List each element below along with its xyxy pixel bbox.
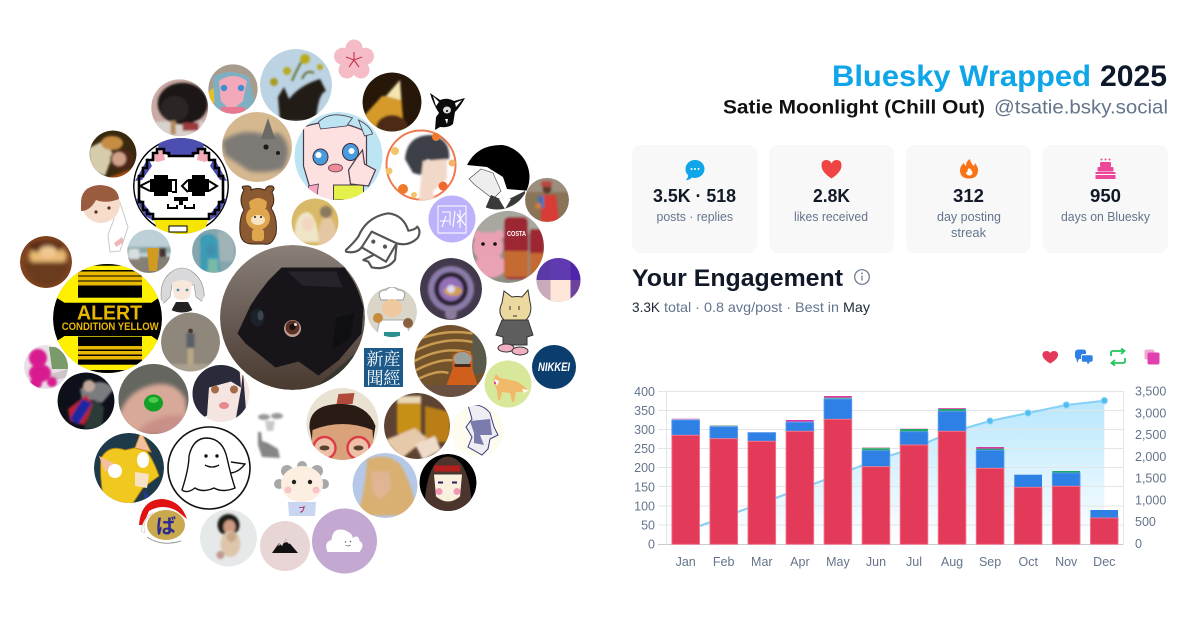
bar: Apr [786,420,814,544]
avatar: Nikkei logo [532,345,576,389]
month labels: Feb [713,555,735,569]
avatar: chihuahua [430,93,465,130]
stat value: 2.8K [813,185,851,206]
avatar: cream cat in gray hoodie [496,290,533,355]
left axis labels: 0 [648,538,655,552]
icon: likes heart [1042,351,1058,364]
avatar: woman with orange cat [89,130,136,180]
avatar: purple beyblade gem [420,258,482,320]
avatar: cartoon chef [367,287,417,337]
avatar: man smoking in dark [58,372,114,430]
heading: your engagement: Your Engagement [632,265,843,292]
bar: Mar [748,432,776,544]
stacked bars [672,396,1118,544]
avatar: beer glasses [384,393,450,460]
avatar: magenta teddy bear by the window [24,345,68,389]
avatar: alert condition yellow: CONDITION YELLOW [62,321,159,333]
month labels: Mar [751,555,773,569]
month labels: Apr [790,555,810,569]
cumulative area [686,401,1104,544]
avatar: green gem on a finger [118,364,190,435]
avatar: lilac cloud [312,508,377,574]
stat value: 312 [953,185,984,206]
month labels: Dec [1093,555,1115,569]
stat label: day posting [937,210,1001,224]
avatar: gray cat [222,112,292,182]
avatar: mountain logo [260,521,310,571]
left axis labels: 250 [634,442,655,456]
icon: quotes squares [1144,350,1160,364]
avatar: sunset silhouette [362,72,422,132]
avatar: black-haired anime girl [191,364,250,424]
avatar: Nikkei logo: NIKKEI [538,362,571,374]
panel: day posting streak [906,145,1031,253]
avatar: large black pug [220,242,368,390]
bar: Aug [938,408,966,544]
engagement summary: 3.3K [632,299,661,315]
left axis labels: 150 [634,480,655,494]
avatar cluster [20,40,580,574]
left axis labels: 400 [634,385,655,399]
month labels: Oct [1018,555,1038,569]
month labels: Jun [866,555,886,569]
avatar: drink on the table [127,230,171,275]
stat value: 3.5K · 518 [653,185,736,206]
stat label: streak [951,226,987,240]
icon: info [855,270,869,284]
avatar: alert condition yellow [53,264,162,373]
avatar: navy pen sketch [452,405,504,457]
right axis labels: 1,500 [1135,472,1166,486]
left axis labels: 350 [634,404,655,418]
month labels: Aug [941,555,963,569]
right axis labels: 1,000 [1135,494,1166,508]
left axis labels: 100 [634,500,655,514]
chart legend icons [1042,348,1160,366]
icon: flame [960,159,978,178]
panel: days on Bluesky [1043,145,1168,253]
bar: Feb [710,425,738,544]
right axis labels: 500 [1135,515,1156,529]
stat label: days on Bluesky [1061,210,1151,224]
right axis labels: 3,500 [1135,384,1166,398]
right axis labels [1135,384,1166,551]
icon: heart [822,160,842,178]
right axis labels: 3,000 [1135,406,1166,420]
engagement summary: total · 0.8 avg/post · Best in [664,299,839,315]
avatar: pink bear and Costa bottles [472,211,544,283]
user name and handle [723,96,1168,118]
month labels: Jul [906,555,922,569]
month labels: Jan [676,555,696,569]
left axis labels: 200 [634,461,655,475]
bar: Sep [976,447,1004,544]
avatar: yellow fox girl [94,432,164,506]
avatar: orange toy on wicker [414,324,487,399]
bar: Jun [862,447,890,544]
right axis labels: 2,000 [1135,450,1166,464]
bar: Nov [1052,471,1080,544]
avatar: smiling ghost in ring [168,427,250,509]
avatar: manga black-haired figure [465,145,531,211]
right axis labels: 2,500 [1135,428,1166,442]
month labels: Sep [979,555,1001,569]
bar: Jul [900,428,928,544]
month labels [676,555,1115,569]
cumulative line [686,397,1108,531]
left axis labels: 50 [641,518,655,532]
avatar: big pink anime character [294,112,382,200]
avatar: black poodle [151,79,209,137]
avatar: hooded girl on yellow [292,198,338,246]
bar: Dec [1090,510,1118,544]
avatar: pink plum flower [334,40,374,78]
avatar: white-haired elf [160,268,204,312]
avatar: orange fox on green [484,360,532,408]
avatar: geisha with red headband [420,454,476,512]
avatar: lilac seal [428,196,476,242]
avatar: blonde woman [352,453,418,518]
icon: replies bubbles [1075,350,1093,365]
bar: Oct [1014,475,1042,544]
avatar: Santa hat ball [139,499,187,543]
avatar: cartoon grandma: ブ [298,505,306,515]
left axis labels [634,385,655,552]
stat value: 950 [1090,185,1121,206]
bar: May [824,396,852,544]
panel: likes received [769,145,894,253]
avatar: woman holding dog [200,510,257,566]
avatar: Sankei newspaper seal: 聞經 [366,364,400,389]
avatar: pink-haired anime girl [208,64,258,115]
avatar: line-art ghost girl [346,213,419,268]
avatar: brown bear with tiger cub [240,186,276,244]
icon: reposts arrows [1111,348,1125,366]
title: Bluesky Wrapped [832,60,1091,93]
icon: chat bubble [685,160,704,180]
month labels: May [826,555,850,569]
user name and handle: @tsatie.bsky.social [994,96,1168,118]
stat label: likes received [794,210,868,224]
avatar: teal-haired girl [192,229,236,273]
avatar: pixel panda with sunglasses [133,136,229,236]
avatar: man with red glasses [306,388,378,460]
avatar: Santa hat ball: ば [156,510,176,539]
avatar: cartoon grandma [274,461,329,516]
stat label [937,210,1001,240]
user name and handle: Satie Moonlight (Chill Out) [723,96,985,118]
avatar: man at a wall [160,312,220,374]
right axis labels: 0 [1135,537,1142,551]
avatar: pink bear and Costa bottles: COSTA [507,231,526,238]
engagement summary: May [843,299,870,315]
avatar: yellow flowers and dark hand [260,49,332,121]
left axis labels: 300 [634,423,655,437]
avatar: purple pixel blocks [536,258,580,302]
stat label: posts · replies [656,210,733,224]
avatar: brown-haired girl peeking [81,185,128,252]
avatar: woman with floral ring [385,129,457,201]
avatar: Sankei newspaper seal [364,345,403,389]
panel: posts and replies [632,145,757,253]
avatar: gray meme figure [258,413,283,458]
avatar: bread bowl [20,236,72,288]
month labels: Nov [1055,555,1078,569]
title: 2025 [1100,60,1167,93]
chart: monthly engagement [634,384,1166,569]
avatar: alert condition yellow: ALERT [77,301,142,324]
icon: birthday cake [1096,158,1116,179]
avatar: Sankei newspaper seal: 新産 [366,345,400,370]
avatar: child in red cape [525,178,569,222]
bar: Jan [672,418,700,544]
